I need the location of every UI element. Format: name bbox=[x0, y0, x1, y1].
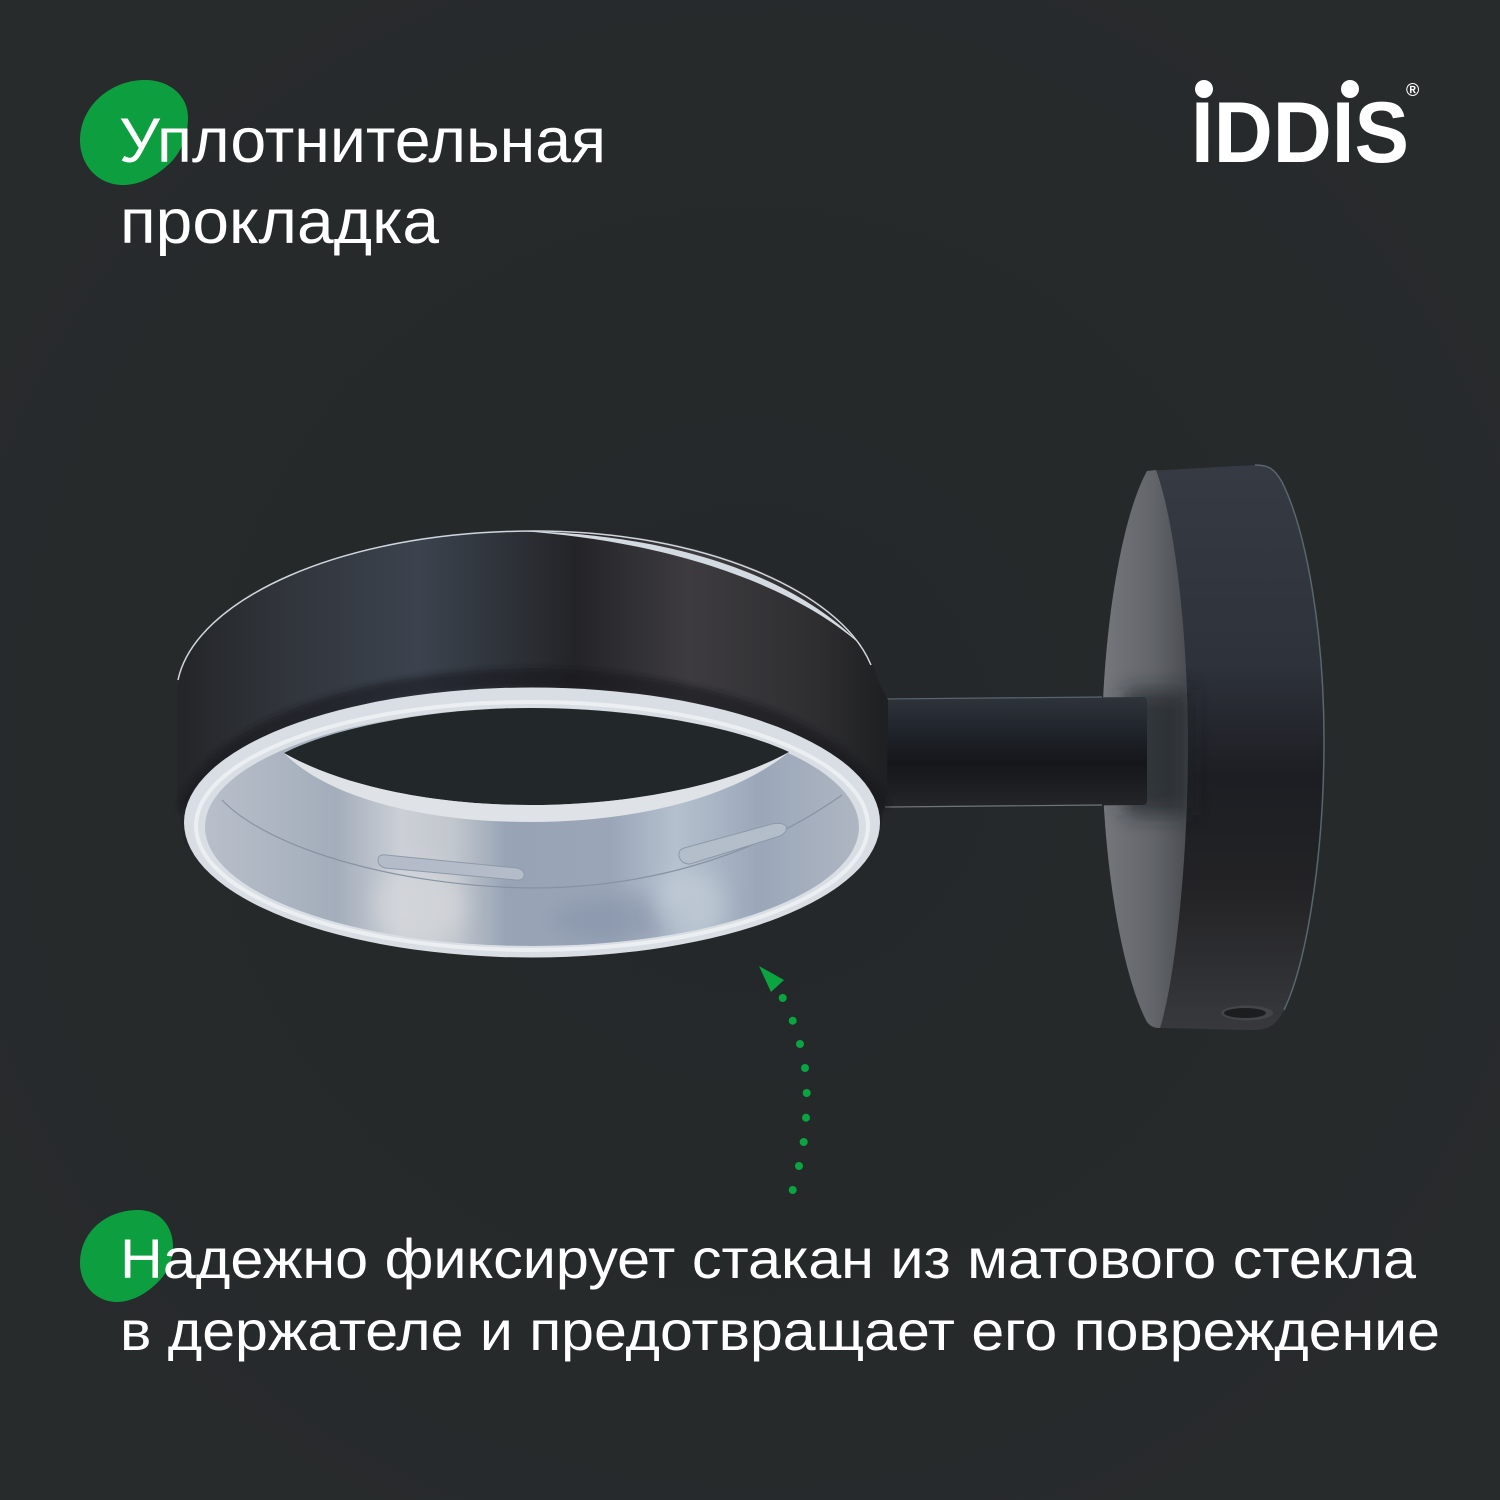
seal: clear gasket bbox=[184, 688, 880, 958]
ring body bbox=[177, 530, 888, 845]
title bbox=[119, 106, 606, 257]
logo: IDDIS: ® bbox=[1406, 80, 1419, 100]
wall plate bbox=[1102, 465, 1324, 1030]
title: прокладка bbox=[120, 187, 440, 257]
screw hole bbox=[1221, 1006, 1273, 1020]
stem bbox=[884, 697, 1147, 807]
hole through ring bbox=[284, 708, 789, 805]
inner wall highlights bbox=[376, 874, 726, 942]
green blob behind description bbox=[80, 1210, 173, 1302]
inner groove bbox=[222, 795, 842, 888]
arrowhead bbox=[759, 966, 784, 992]
green blob behind title bbox=[80, 80, 188, 185]
tab left bbox=[378, 855, 524, 880]
logo: IDDIS: IDDIS bbox=[1191, 85, 1409, 181]
dots bbox=[779, 994, 811, 1194]
title: Уплотнительная bbox=[119, 106, 606, 176]
tab right bbox=[679, 823, 786, 864]
description text bbox=[120, 1227, 1440, 1362]
description text: в держателе и предотвращает его повреждение bbox=[120, 1299, 1440, 1362]
product photo: glass holder bbox=[177, 465, 1324, 1030]
description text: Надежно фиксирует стакан из матового стекла bbox=[120, 1227, 1417, 1290]
dotted arrow bbox=[759, 966, 811, 1194]
